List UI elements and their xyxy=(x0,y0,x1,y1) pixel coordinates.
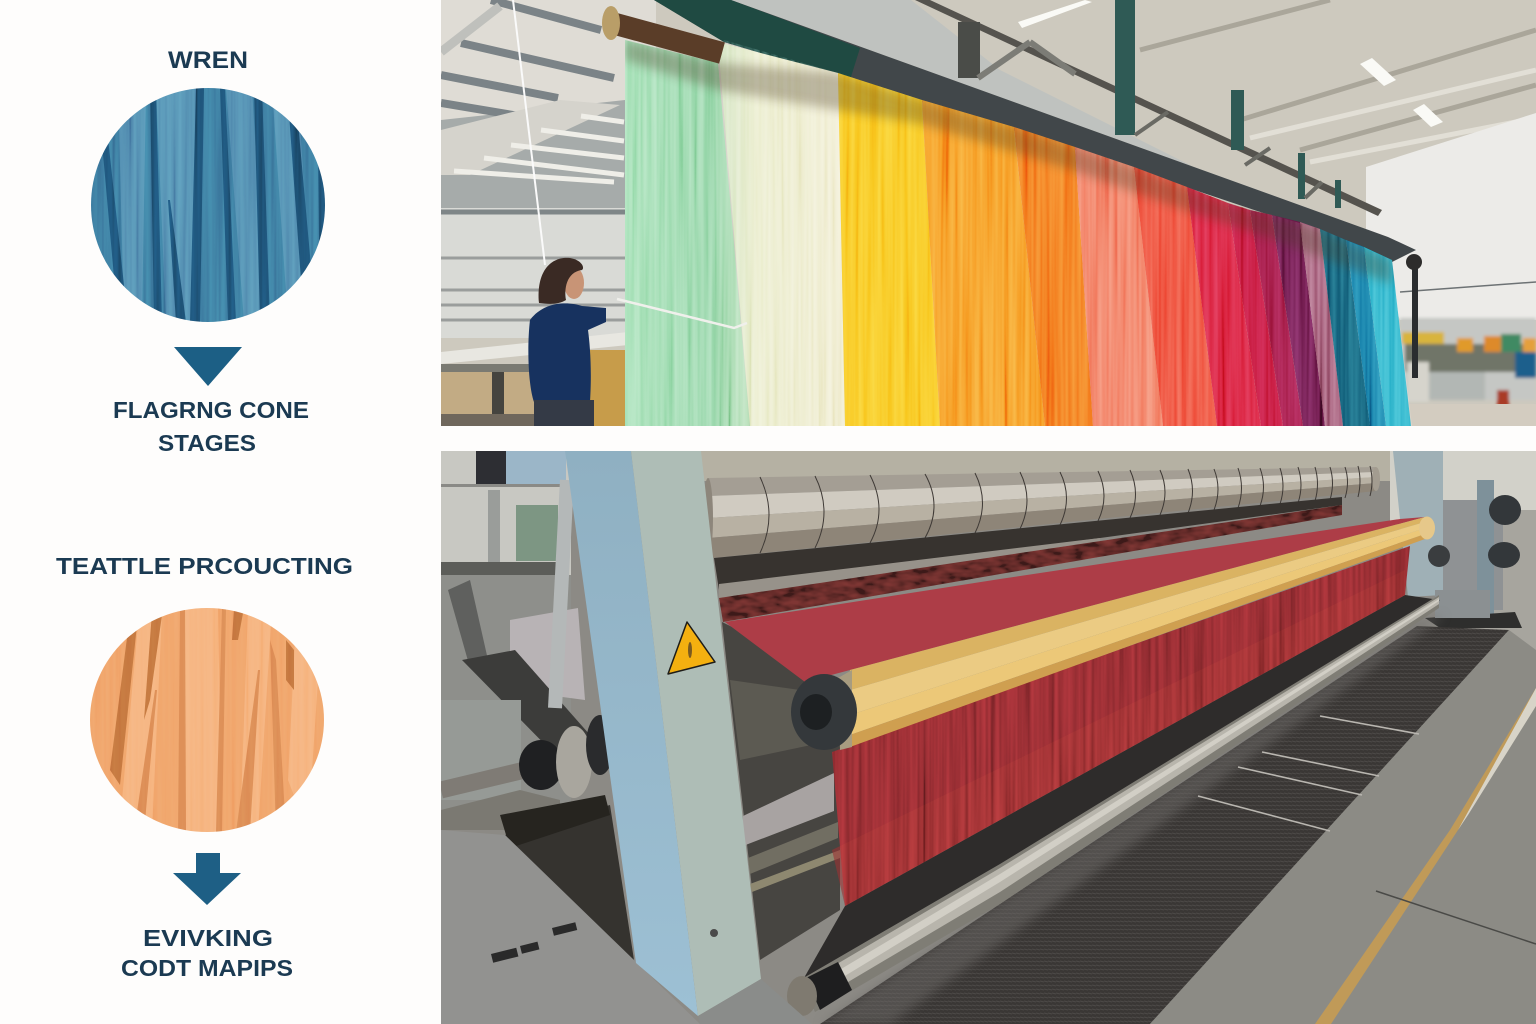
arrow: blue block arrow xyxy=(173,853,241,905)
label: flagrng cone stages: FLAGRNG CONE xyxy=(113,397,309,423)
panel: photo of coloured yarn hanging in factory xyxy=(441,0,1536,426)
label: flagrng cone stages: STAGES xyxy=(158,430,256,456)
overhead beam and rail xyxy=(654,0,1422,378)
right end machinery xyxy=(1393,451,1522,628)
icon: yellow warning triangle xyxy=(668,622,715,674)
panel: left process column xyxy=(56,52,352,976)
worker figure xyxy=(528,258,747,426)
image: blue fabric circle xyxy=(90,88,326,322)
label: evivking codt mapips xyxy=(121,925,293,981)
factory background xyxy=(441,451,1536,650)
label: flagrng cone stages xyxy=(113,397,309,456)
wooden rod xyxy=(602,6,722,53)
red fabric on table xyxy=(725,517,1425,682)
yellow cloth roll xyxy=(791,516,1435,750)
loom teeth band xyxy=(714,497,1345,625)
dark mesh conveyor floor xyxy=(800,595,1536,1024)
hanging red fabric xyxy=(830,540,1420,910)
panel: photo of red fabric weaving machine xyxy=(441,451,1536,1024)
left mechanism xyxy=(441,480,700,1024)
blue-grey machine column xyxy=(565,451,812,1024)
arrow: blue triangle xyxy=(174,347,242,386)
label: evivking codt mapips: EVIVKING xyxy=(143,925,273,951)
heading: wren: WREN xyxy=(168,47,248,74)
factory ceiling left xyxy=(441,0,656,426)
large silver warp beam xyxy=(703,466,1380,558)
heading: teattle prcoucting: TEATTLE PRCOUCTING xyxy=(56,553,353,579)
machine interior behind fabric xyxy=(722,622,840,960)
factory ceiling and wall right xyxy=(1018,0,1536,426)
image: orange fabric circle xyxy=(90,608,324,832)
yarn colour bands xyxy=(625,0,1415,426)
silver floor roller xyxy=(787,595,1439,1016)
label: evivking codt mapips: CODT MAPIPS xyxy=(121,955,293,981)
